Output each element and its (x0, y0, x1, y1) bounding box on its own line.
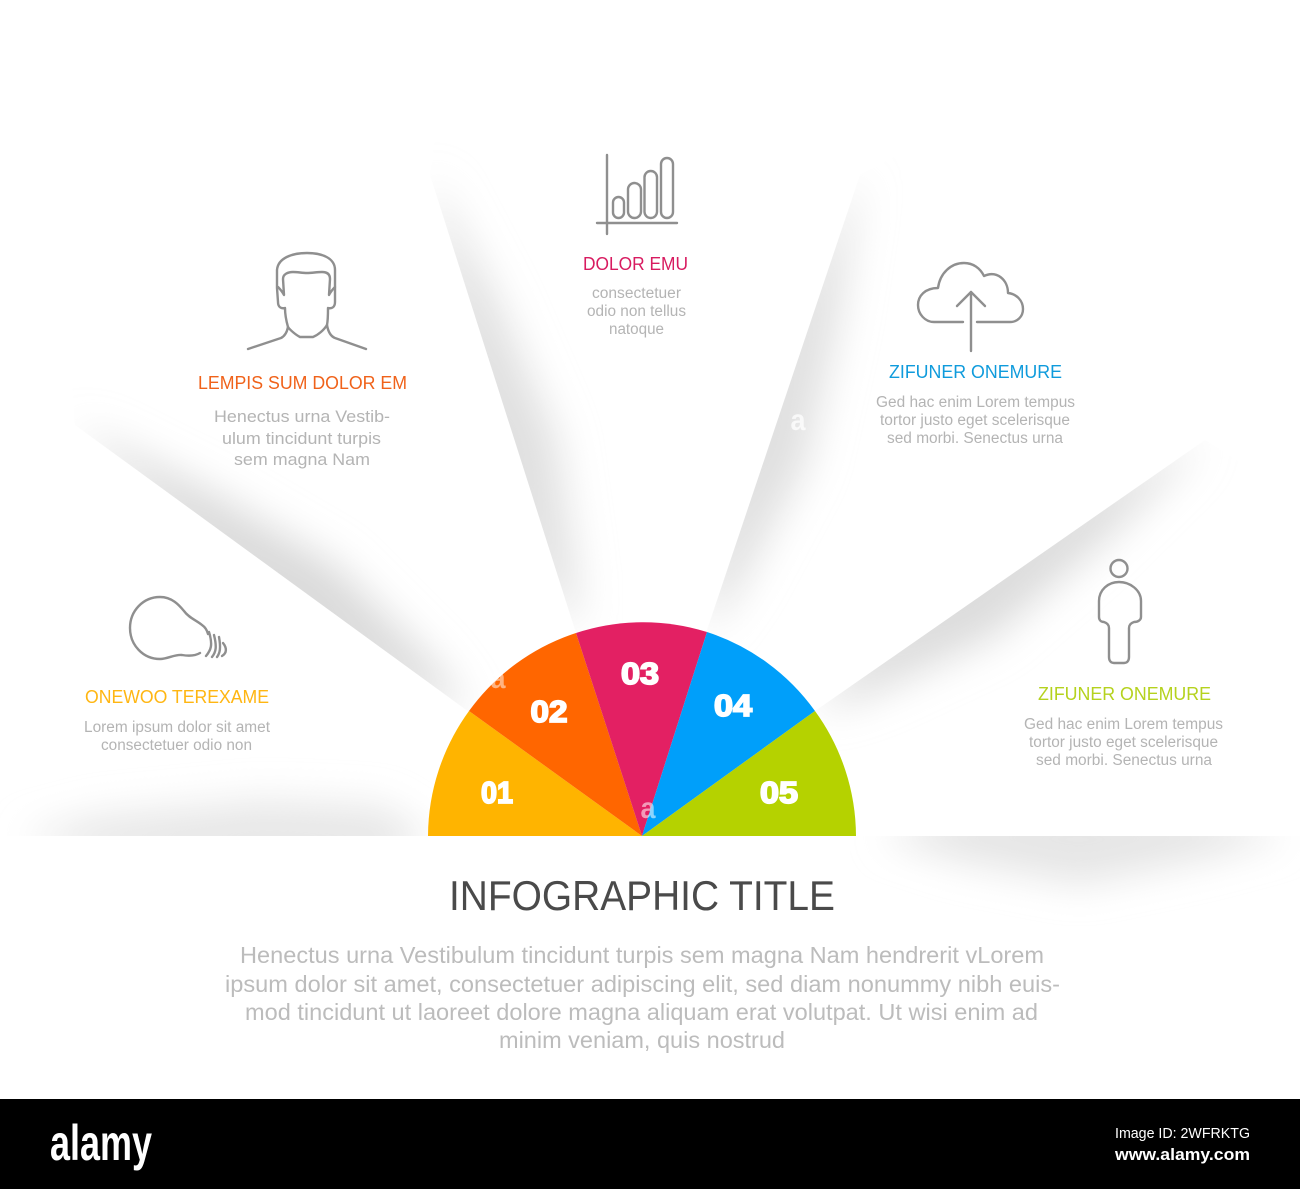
panel 1: onewoo terexame (84, 597, 271, 754)
text block: tortor justo eget scelerisque (1029, 734, 1218, 751)
icon: cloud upload (918, 263, 1023, 351)
panel 4: zifuner onemure blue (876, 263, 1075, 447)
text block: consectetuer odio non (101, 737, 252, 754)
segment 03: 03 (621, 656, 659, 691)
text block: tortor justo eget scelerisque (880, 412, 1070, 429)
watermark letters: a (640, 792, 656, 825)
icon: bar chart (597, 155, 677, 234)
footer bar (0, 1099, 1300, 1189)
semicircle pie chart (428, 622, 856, 836)
text block (84, 719, 271, 754)
icon: man head and shoulders (248, 253, 366, 349)
segment 02: 02 (530, 694, 568, 729)
description text: minim veniam, quis nostrud (499, 1027, 785, 1053)
segment 01: 01 (481, 775, 513, 810)
heading: ONEWOO TEREXAME (85, 687, 269, 707)
text block (1024, 716, 1223, 769)
icon: light bulb (130, 597, 226, 659)
text block: Ged hac enim Lorem tempus (1024, 716, 1223, 733)
panel 3: dolor emu (583, 155, 688, 338)
text block (587, 285, 686, 338)
heading: DOLOR EMU (583, 254, 688, 274)
description text: ipsum dolor sit amet, consectetuer adipiscing elit, sed diam nonummy nibh euis- (225, 971, 1060, 997)
heading: ZIFUNER ONEMURE (1038, 684, 1211, 704)
text block: natoque (609, 321, 664, 338)
text block: Henectus urna Vestib- (214, 407, 390, 426)
text block: Lorem ipsum dolor sit amet (84, 719, 271, 736)
segment 04 (642, 632, 815, 836)
watermark letters (490, 404, 806, 825)
image id: Image ID: 2WFRKTG (1115, 1125, 1250, 1142)
text block: sed morbi. Senectus urna (887, 430, 1063, 447)
text block: odio non tellus (587, 303, 686, 320)
segment 05: 05 (760, 775, 798, 810)
heading: ZIFUNER ONEMURE (889, 362, 1062, 382)
alamy logo: alamy (50, 1115, 152, 1171)
text block: ulum tincidunt turpis (222, 429, 381, 448)
text block: sem magna Nam (234, 450, 370, 469)
ray shadows (20, 175, 1290, 885)
segment 04: 04 (714, 688, 753, 723)
website: www.alamy.com (1114, 1145, 1250, 1164)
panel 5: zifuner onemure green (1024, 560, 1223, 769)
text block: consectetuer (592, 285, 681, 302)
text block: sed morbi. Senectus urna (1036, 752, 1212, 769)
segment 01 (428, 711, 642, 836)
panel 2: lempis sum dolor em (198, 253, 407, 469)
segment 05 (642, 711, 856, 836)
segment 03 (576, 622, 707, 836)
text block (876, 394, 1075, 447)
description text: Henectus urna Vestibulum tincidunt turpis sem magna Nam hendrerit vLorem (240, 942, 1044, 968)
watermark letters: a (790, 404, 806, 437)
heading: LEMPIS SUM DOLOR EM (198, 373, 407, 393)
text block: Ged hac enim Lorem tempus (876, 394, 1075, 411)
description text: mod tincidunt ut laoreet dolore magna aliquam erat volutpat. Ut wisi enim ad (245, 999, 1038, 1025)
segment 02 (469, 633, 642, 836)
text block (214, 407, 390, 469)
title: INFOGRAPHIC TITLE (449, 872, 835, 919)
watermark letters: a (490, 662, 506, 695)
description text (225, 942, 1060, 1053)
icon: person (1099, 560, 1141, 663)
